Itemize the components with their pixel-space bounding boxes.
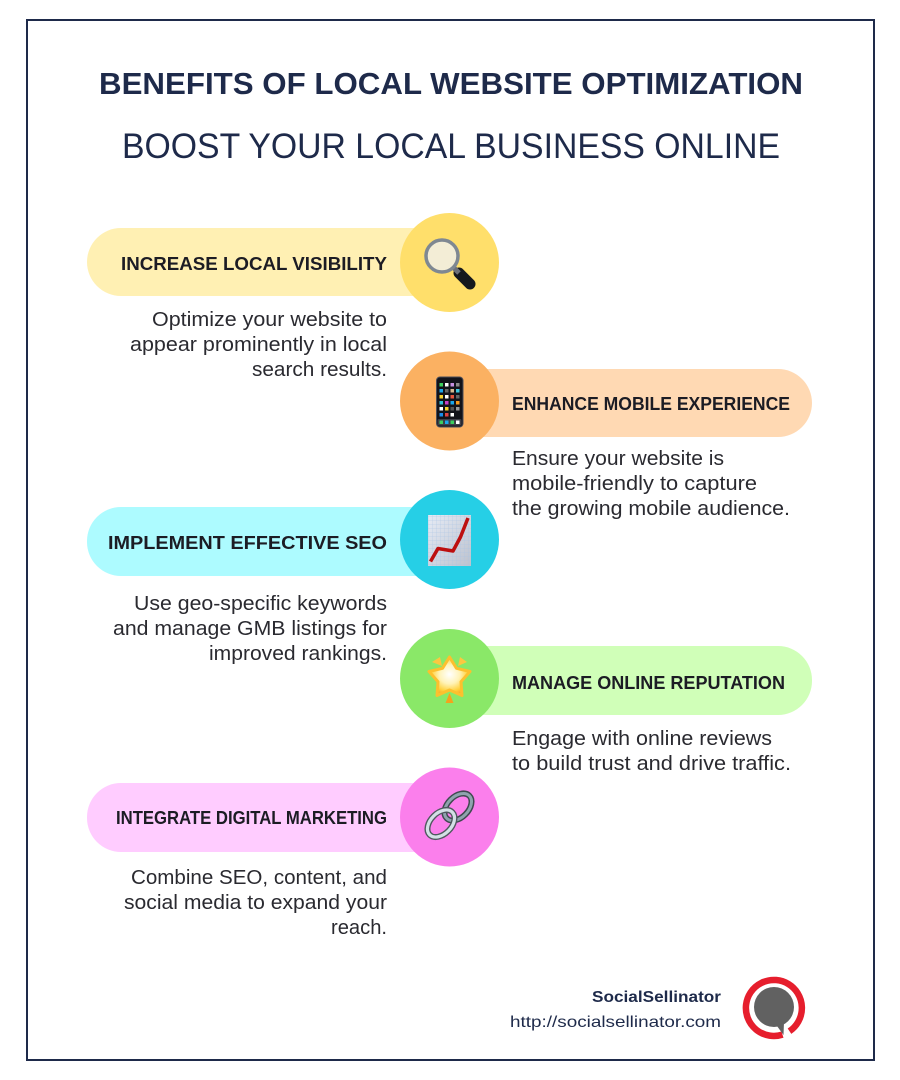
description: Use geo-specific keywords — [134, 593, 387, 615]
panel: increase local visibility — [87, 213, 499, 381]
description: search results. — [252, 359, 387, 381]
panel: enhance mobile experience — [400, 352, 812, 520]
icon circle — [400, 352, 499, 450]
icon circle — [400, 768, 499, 866]
description — [124, 867, 387, 939]
description: Engage with online reviews — [512, 728, 772, 750]
description — [113, 593, 387, 665]
description: social media to expand your — [124, 892, 387, 914]
brand url: http://socialsellinator.com — [510, 1014, 721, 1031]
pill — [87, 228, 450, 296]
icon: smartphone — [436, 377, 463, 427]
panel: implement effective seo — [87, 490, 499, 665]
icon circle — [400, 490, 499, 589]
heading: INCREASE LOCAL VISIBILITY — [121, 254, 387, 274]
description — [512, 728, 791, 775]
icon: magnifying glass — [426, 240, 470, 284]
description: and manage GMB listings for — [113, 618, 387, 640]
heading: MANAGE ONLINE REPUTATION — [512, 673, 785, 693]
icon: chain link — [422, 788, 477, 842]
heading: INTEGRATE DIGITAL MARKETING — [116, 808, 387, 828]
panel: integrate digital marketing — [87, 768, 499, 939]
icon: glowing star — [429, 657, 470, 703]
pill — [87, 783, 450, 852]
heading: ENHANCE MOBILE EXPERIENCE — [512, 394, 790, 414]
icon: rising chart — [428, 515, 471, 566]
description: appear prominently in local — [130, 334, 387, 356]
subtitle: BOOST YOUR LOCAL BUSINESS ONLINE — [122, 127, 780, 166]
description — [130, 309, 387, 381]
description: the growing mobile audience. — [512, 498, 790, 520]
heading: IMPLEMENT EFFECTIVE SEO — [108, 533, 387, 553]
description: reach. — [331, 917, 387, 939]
icon circle — [400, 629, 499, 728]
icon circle — [400, 213, 499, 312]
pill — [450, 369, 812, 437]
icon: brand logo — [746, 980, 802, 1036]
pill — [450, 646, 812, 715]
description: to build trust and drive traffic. — [512, 753, 791, 775]
pill — [87, 507, 450, 576]
panel: manage online reputation — [400, 629, 812, 775]
title: BENEFITS OF LOCAL WEBSITE OPTIMIZATION — [99, 66, 803, 101]
description — [512, 448, 790, 520]
description: Optimize your website to — [152, 309, 387, 331]
description: improved rankings. — [209, 643, 387, 665]
brand name: SocialSellinator — [592, 989, 721, 1006]
description: Combine SEO, content, and — [131, 867, 387, 889]
description: Ensure your website is — [512, 448, 724, 470]
description: mobile-friendly to capture — [512, 473, 757, 495]
